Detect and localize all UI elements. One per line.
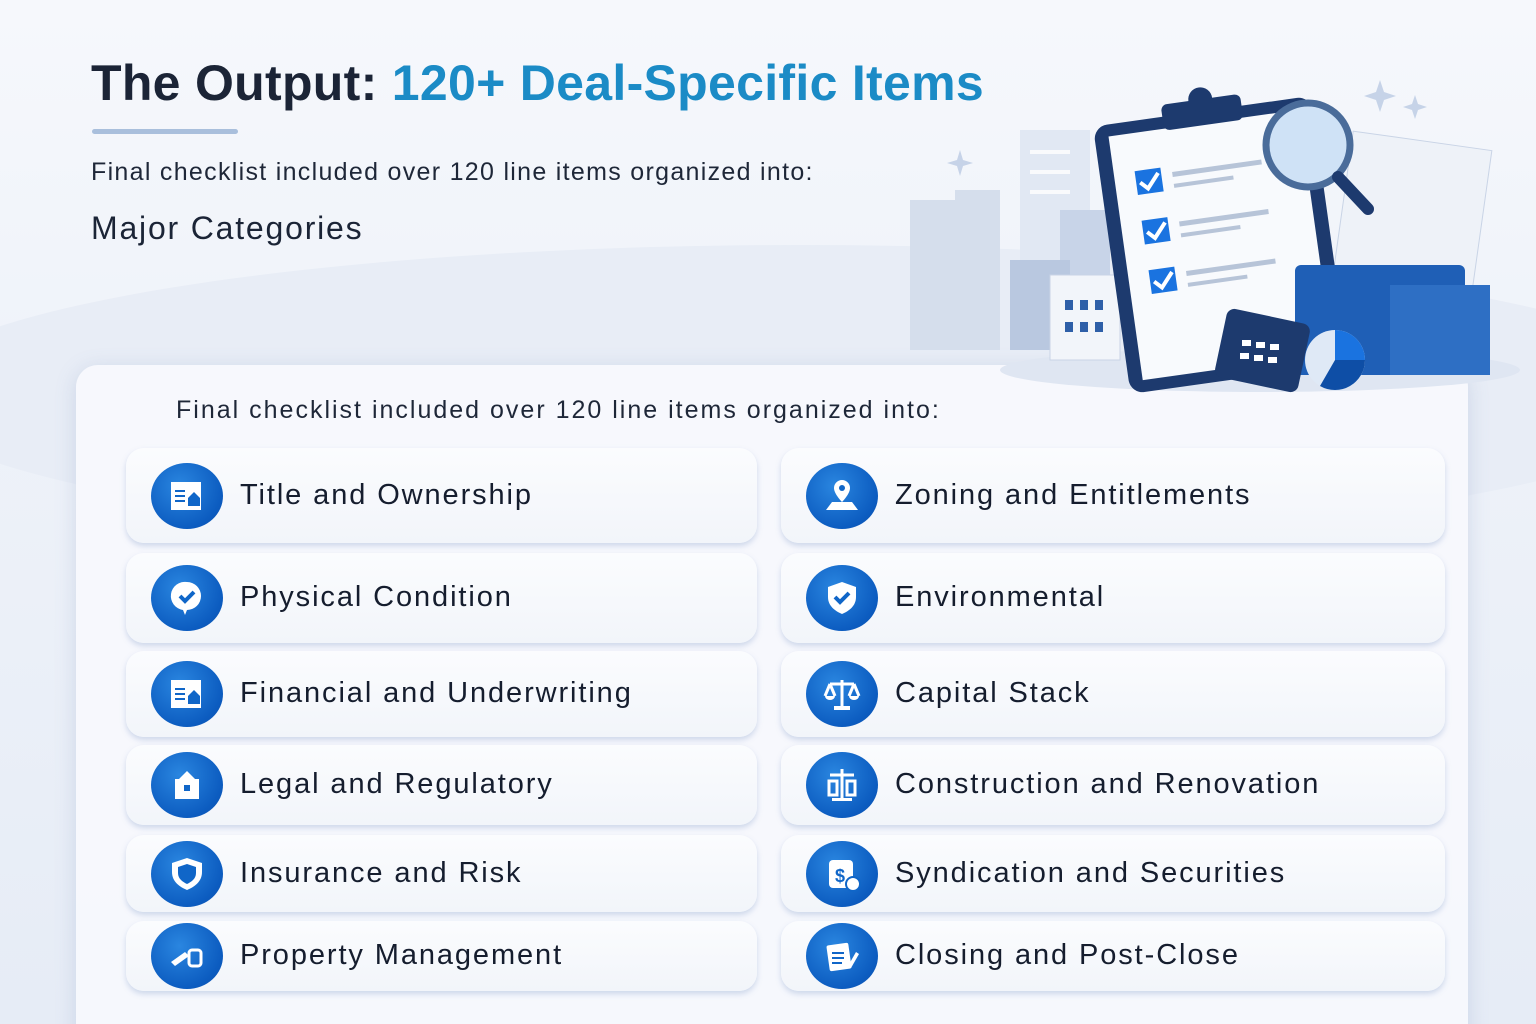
card: Physical Condition: [126, 553, 757, 643]
title: The Output: 120+ Deal-Specific Items: [91, 55, 984, 111]
subtitle: Final checklist included over 120 line items organized into:: [91, 158, 814, 186]
card: Construction and Renovation: [781, 745, 1445, 825]
main panel: [76, 365, 1468, 1024]
card: Closing and Post-Close: Closing and Post-Close: [895, 939, 1240, 971]
heading: major categories: Major Categories: [91, 210, 363, 246]
card: Financial and Underwriting: Financial and Underwriting: [240, 677, 633, 709]
card: Insurance and Risk: Insurance and Risk: [240, 856, 522, 888]
card: Syndication and Securities: $: [835, 866, 845, 886]
card: Insurance and Risk: [126, 835, 757, 912]
card: Title and Ownership: [126, 448, 757, 543]
panel text: Final checklist included over 120 line items organized into:: [176, 396, 941, 424]
card: Property Management: Property Management: [240, 939, 563, 971]
card: Construction and Renovation: Construction and Renovation: [895, 768, 1320, 800]
card: Property Management: [126, 921, 757, 991]
card: Zoning and Entitlements: Zoning and Entitlements: [895, 478, 1251, 510]
card: Capital Stack: [781, 651, 1445, 737]
illustration: clipboard with buildings: [910, 80, 1520, 392]
card: Capital Stack: Capital Stack: [895, 677, 1091, 709]
card: Zoning and Entitlements: [781, 448, 1445, 543]
card: Title and Ownership: Title and Ownership: [240, 478, 533, 510]
card: Legal and Regulatory: Legal and Regulatory: [240, 768, 554, 800]
card: Physical Condition: Physical Condition: [240, 581, 513, 613]
card: Syndication and Securities: Syndication and Securities: [895, 856, 1286, 888]
card: Closing and Post-Close: [781, 921, 1445, 991]
card: Environmental: Environmental: [895, 581, 1105, 613]
card: Environmental: [781, 553, 1445, 643]
card: Syndication and Securities: [781, 835, 1445, 912]
card: Legal and Regulatory: [126, 745, 757, 825]
card: Financial and Underwriting: [126, 651, 757, 737]
